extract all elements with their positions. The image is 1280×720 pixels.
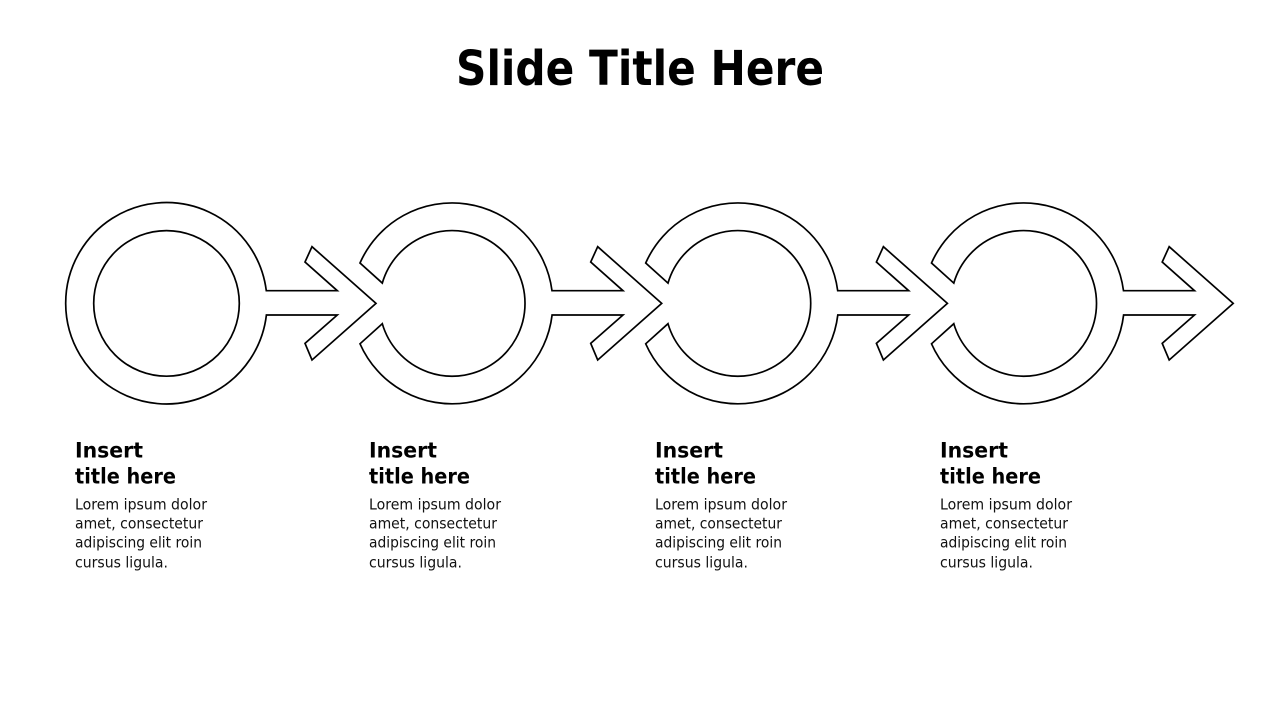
text block 3: [655, 439, 788, 571]
process chain of four ring arrows: [66, 203, 1233, 404]
text block 3: title here: [655, 465, 756, 489]
text block 3: adipiscing elit roin: [655, 533, 782, 551]
ring arrow 1: [66, 203, 376, 404]
title: Slide Title Here: [456, 41, 824, 97]
text block 3: Lorem ipsum dolor: [655, 495, 788, 513]
text block 1: amet, consectetur: [75, 514, 204, 532]
text block 4: Lorem ipsum dolor: [940, 495, 1073, 513]
text block 2: cursus ligula.: [369, 553, 462, 571]
text block 3: amet, consectetur: [655, 514, 783, 532]
text block 4: amet, consectetur: [940, 514, 1069, 532]
ring arrow 2: [360, 203, 662, 404]
text block 4: cursus ligula.: [940, 553, 1033, 571]
text block 4: Insert: [940, 439, 1008, 463]
text block 1: title here: [75, 465, 176, 489]
ring arrow 4: [932, 203, 1233, 404]
text block 1: [75, 439, 208, 571]
text block 3: cursus ligula.: [655, 553, 748, 571]
text block 1: Insert: [75, 439, 143, 463]
text block 1: Lorem ipsum dolor: [75, 495, 208, 513]
text block 2: adipiscing elit roin: [369, 533, 496, 551]
text block 1: cursus ligula.: [75, 553, 168, 571]
text block 2: [369, 439, 502, 571]
text block 3: Insert: [655, 439, 723, 463]
text block 2: amet, consectetur: [369, 514, 498, 532]
text block 4: [940, 439, 1073, 571]
text block 2: title here: [369, 465, 470, 489]
ring arrow 3: [646, 203, 947, 404]
text block 2: Insert: [369, 439, 437, 463]
text block 4: title here: [940, 465, 1041, 489]
text block 1: adipiscing elit roin: [75, 533, 202, 551]
text block 4: adipiscing elit roin: [940, 533, 1067, 551]
text block 2: Lorem ipsum dolor: [369, 495, 502, 513]
